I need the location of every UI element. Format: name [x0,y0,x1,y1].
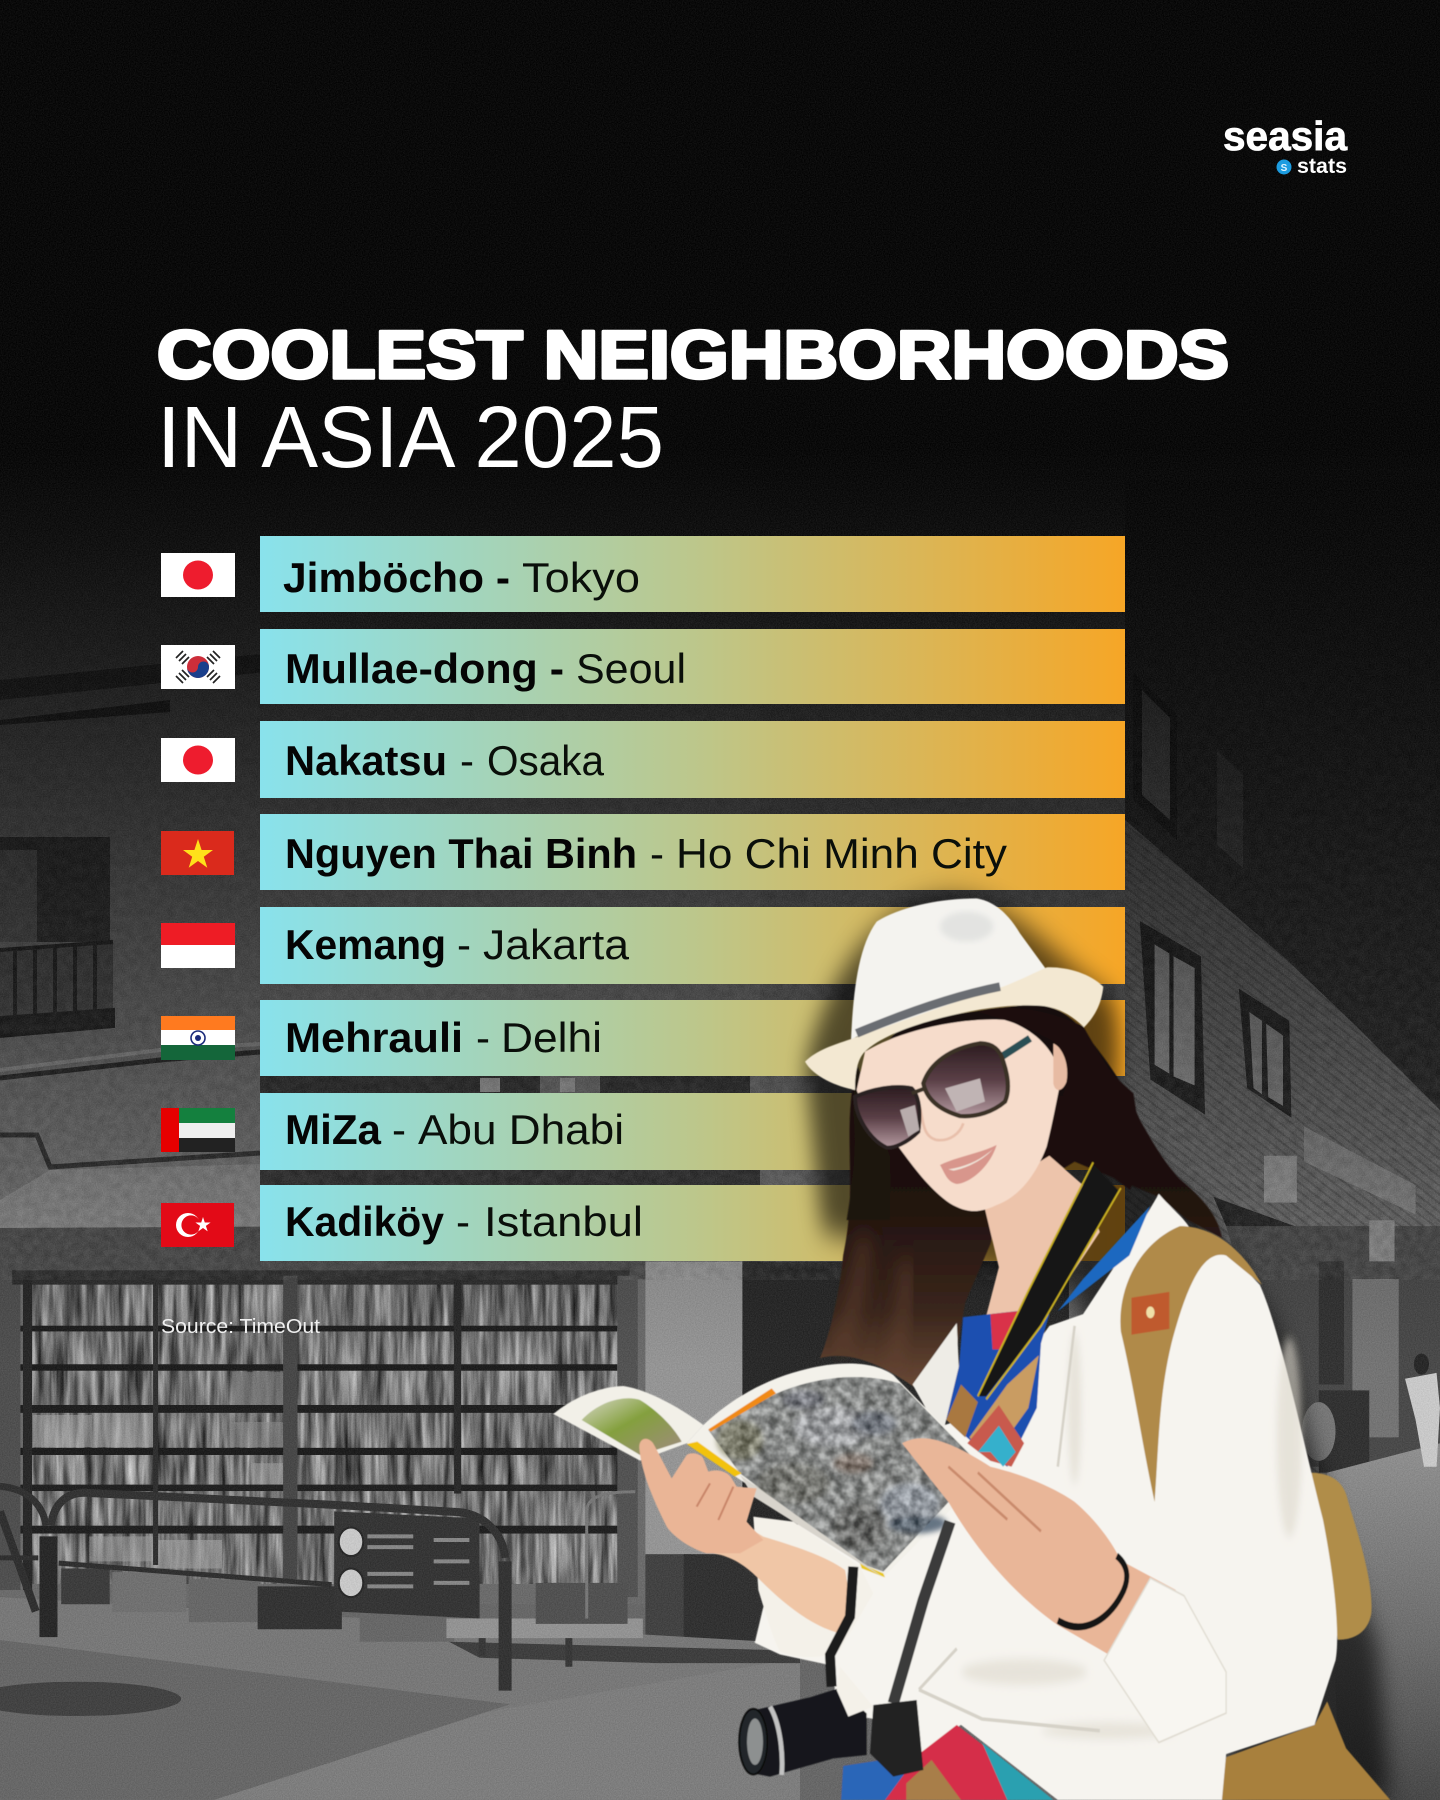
row 6: Mehrauli: - [476,1014,490,1061]
row 7: MiZa [161,1093,1125,1170]
row 7: MiZa: MiZa [285,1106,382,1153]
row 5: Kemang: - [457,921,471,968]
row 2: Mullae-dong: Seoul [576,645,686,692]
row 6: Mehrauli: Mehrauli [285,1014,463,1061]
row 1: Jimbocho: Tokyo [522,554,640,601]
row 7: MiZa: Abu Dhabi [418,1106,624,1153]
shirt [755,1194,1337,1800]
sun hat [805,898,1103,1090]
hair [820,1004,1222,1387]
title [157,317,1229,486]
hair highlights [839,1238,906,1364]
bookshelf [12,1270,638,1597]
row 6: Mehrauli [161,1000,1125,1076]
row 4: Nguyen Thai Binh: Nguyen Thai Binh [285,830,637,877]
blurred photo texture on page [708,1377,982,1572]
camera neck strap [978,1162,1121,1399]
row 2: Mullae-dong: Mullae-dong - [285,645,564,692]
woman shadow [805,898,1390,1800]
row 7: MiZa: - [392,1106,406,1153]
row 8: Kadikoy: Istanbul [484,1198,643,1245]
row 5: Kemang: Jakarta [483,921,630,968]
wall mottling [0,480,1440,1280]
hair around face [847,1060,890,1220]
neck [982,1156,1100,1332]
left arm and guidebook [553,1363,988,1777]
row 1: Jimbocho: Jimböcho - [283,554,510,601]
row 3: Nakatsu: Osaka [487,737,605,784]
face [857,1019,1062,1211]
row 3: Nakatsu: - [460,737,474,784]
camera [739,1667,923,1777]
title: IN ASIA 2025 [157,389,664,486]
logo: seasia stats: seasia [1223,113,1348,159]
row 6: Mehrauli: Delhi [501,1014,602,1061]
icon: blue S dot: S [1281,163,1288,174]
row 1: Jimbocho [161,536,1125,612]
row 8: Kadikoy [161,1185,1125,1261]
left building wall [0,480,760,1280]
row 4: Nguyen Thai Binh [161,814,1125,890]
right building wall [760,480,1440,1800]
guidebook [553,1363,988,1577]
left hand [639,1439,763,1553]
row 8: Kadikoy: - [456,1198,470,1245]
fence, boxes, cart and sign [0,1486,643,1716]
row 3: Nakatsu: Nakatsu [285,737,447,784]
neck strap to camera [893,1522,950,1703]
wrist strap [830,1567,853,1687]
source note: Source: TimeOut [161,1316,320,1338]
title: COOLEST NEIGHBORHOODS [157,317,1229,393]
head with hat and sunglasses [805,898,1143,1220]
ranking list [161,536,1125,1261]
bookshop and sidewalk [0,1261,1069,1800]
sunglasses [855,1038,1030,1148]
logo: seasia stats: stats [1297,155,1347,178]
hair above ear [977,1008,1143,1190]
mouth [940,1145,997,1184]
row 8: Kadikoy: Kadiköy [285,1198,445,1245]
backpack [1218,1473,1390,1800]
right hand, forearm and cuff [902,1438,1226,1742]
patterned dress [841,1206,1150,1800]
nose shade [920,1107,963,1140]
left sleeve [753,1517,873,1657]
backpack shoulder strap [1120,1226,1262,1502]
row 4: Nguyen Thai Binh: - [650,830,664,877]
row 5: Kemang: Kemang [285,921,446,968]
row 2: Mullae-dong [161,629,1125,704]
row 5: Kemang [161,907,1125,984]
ear [1053,1043,1069,1090]
row 3: Nakatsu [161,721,1125,798]
row 4: Nguyen Thai Binh: Ho Chi Minh City [676,830,1007,877]
illustration: woman with guidebook [553,898,1390,1800]
left forearm [713,1527,848,1633]
